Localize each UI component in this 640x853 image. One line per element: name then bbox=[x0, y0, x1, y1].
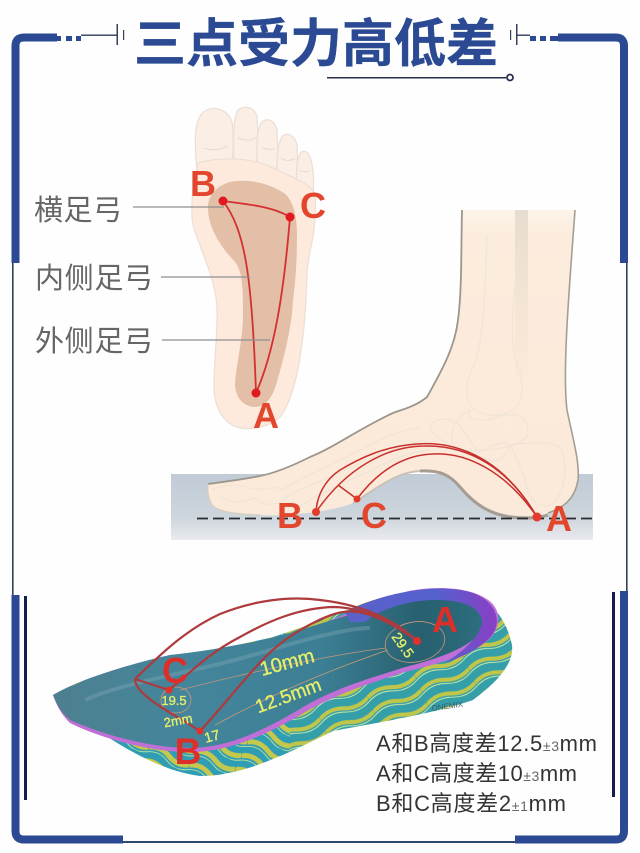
label: medial arch: 内侧足弓 bbox=[35, 255, 153, 297]
arch curves bbox=[316, 444, 537, 517]
insole point letters: A bbox=[432, 599, 458, 640]
3D insole bbox=[53, 588, 512, 776]
insole patterned base bbox=[53, 596, 512, 776]
sole of foot diagram: B bbox=[190, 163, 216, 204]
height difference text bbox=[376, 731, 597, 816]
floor bbox=[171, 474, 593, 540]
sole of foot diagram: C bbox=[300, 185, 326, 226]
insole measurements: 12.5mm bbox=[253, 675, 324, 718]
title: 三点受力高低差 bbox=[134, 2, 498, 77]
callout lines bbox=[133, 207, 270, 340]
insole measurements: 17 bbox=[202, 726, 222, 746]
title underline with dot bbox=[327, 74, 513, 80]
surface highlight bbox=[85, 628, 370, 700]
insole dark side lettering: ONEMIX bbox=[431, 700, 464, 713]
side view of foot on floor: C bbox=[361, 495, 387, 536]
insole measurements: 29.5 bbox=[389, 629, 417, 661]
insole measurements: 10mm bbox=[258, 645, 317, 681]
bones bbox=[212, 235, 565, 506]
height difference text: A和C高度差10±3mm bbox=[376, 761, 577, 786]
sole of foot diagram: A bbox=[253, 395, 279, 436]
measurement guides bbox=[161, 617, 448, 725]
foot and leg bbox=[208, 210, 578, 516]
insole measurements: 19.5 bbox=[161, 693, 187, 708]
insole top surface bbox=[53, 596, 486, 748]
insole point letters: B bbox=[175, 731, 201, 772]
heel cup bbox=[345, 589, 497, 663]
red arch curves bbox=[135, 599, 417, 731]
dashed ground line bbox=[197, 518, 592, 520]
label: transverse arch: 横足弓 bbox=[34, 187, 122, 229]
pink rim bbox=[53, 588, 498, 752]
side view of foot on floor bbox=[171, 210, 593, 540]
insole measurements: 2mm bbox=[163, 711, 194, 730]
toes bbox=[195, 107, 314, 198]
foot sole outline bbox=[192, 159, 316, 428]
insole point letters bbox=[162, 599, 458, 772]
side view of foot on floor: A bbox=[546, 498, 572, 539]
side view of foot on floor: B bbox=[277, 495, 303, 536]
insole point letters: C bbox=[162, 650, 188, 691]
height difference text: B和C高度差2±1mm bbox=[376, 791, 566, 816]
sole of foot diagram bbox=[190, 107, 326, 436]
insole measurements bbox=[161, 629, 417, 746]
label: lateral arch: 外侧足弓 bbox=[35, 318, 153, 360]
arch pressure zone bbox=[208, 181, 297, 407]
height difference text: A和B高度差12.5±3mm bbox=[376, 731, 597, 756]
triangle ABC bbox=[223, 201, 290, 393]
